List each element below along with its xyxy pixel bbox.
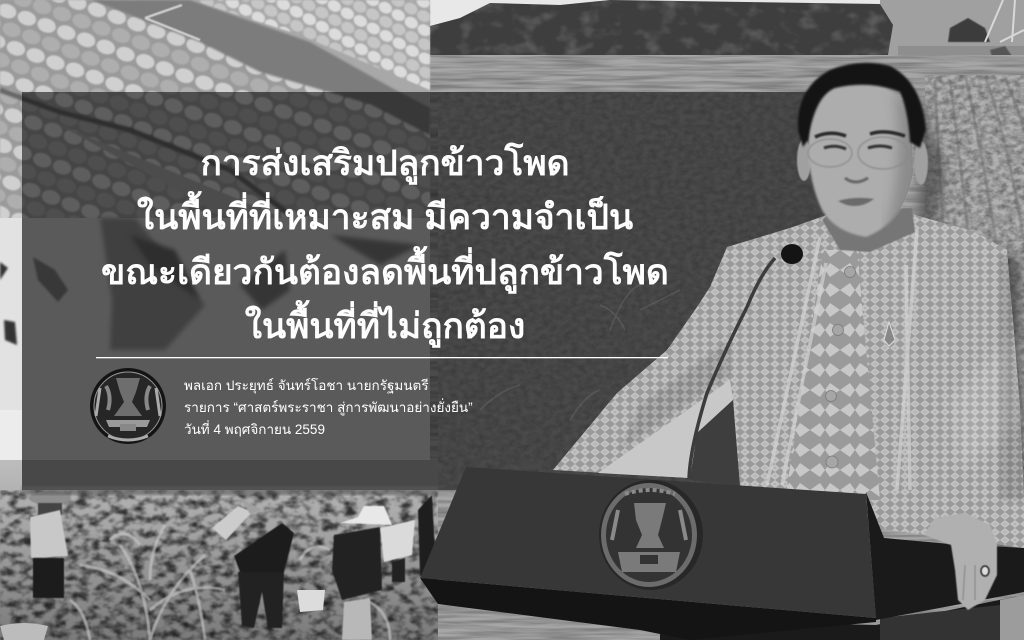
photo: corn cobs: [0, 0, 430, 225]
podium: [420, 467, 1024, 640]
background: sky and hills: [430, 0, 1024, 60]
podium seal: [599, 480, 703, 590]
panel: dark overlay: [22, 92, 840, 495]
microphone: [689, 244, 803, 479]
title: [101, 142, 669, 348]
photo: white animal strip: [0, 218, 430, 463]
lapel pin: [884, 322, 895, 346]
photo: farmers in a corn field: [0, 460, 438, 640]
glasses, brows, nose, mouth: [808, 132, 908, 206]
basin: [0, 623, 48, 640]
coat: [553, 212, 1024, 548]
farmer 1: [29, 491, 71, 598]
buttons: [826, 266, 856, 468]
title: ในพื้นที่ที่เหมาะสม มีความจำเป็น: [137, 191, 633, 237]
corn plants: [70, 525, 390, 640]
ears: [797, 139, 928, 185]
side shelf: [866, 492, 1024, 620]
background: ploughed field: [430, 55, 1024, 640]
underside: [420, 578, 876, 640]
speaker credit: รายการ “ศาสตร์พระราชา สู่การพัฒนาอย่างยั่งยืน”: [184, 398, 473, 416]
title: ในพื้นที่ที่ไม่ถูกต้อง: [245, 300, 525, 348]
gap under arm: [690, 400, 740, 486]
soft shadow: [918, 90, 1024, 560]
fabric shading: [620, 340, 730, 450]
figure: speaker: [553, 63, 1024, 640]
title: ขณะเดียวกันต้องลดพื้นที่ปลูกข้าวโพด: [101, 246, 669, 294]
farmer 3: [332, 495, 437, 640]
neck and collar: [822, 208, 915, 252]
trousers below podium: [660, 595, 1024, 640]
face shading: [884, 94, 913, 226]
divider line: [96, 357, 668, 358]
face: [808, 83, 913, 237]
front panel: [420, 467, 876, 618]
title: การส่งเสริมปลูกข้าวโพด: [200, 142, 570, 185]
background: tree line: [430, 0, 1024, 57]
hair: [798, 63, 926, 148]
speaker credit: [184, 377, 473, 437]
shirt cuff: [598, 380, 733, 478]
bucket: [297, 590, 325, 612]
farmer 2: [212, 498, 294, 628]
background: young corn rows on the right: [925, 75, 1024, 475]
icon: government seal: [90, 368, 166, 444]
speaker credit: วันที่ 4 พฤศจิกายน 2559: [184, 420, 325, 437]
speaker credit: พลเอก ประยุทธ์ จันทร์โอชา นายกรัฐมนตรี: [184, 377, 429, 394]
hand on podium: [924, 513, 997, 610]
